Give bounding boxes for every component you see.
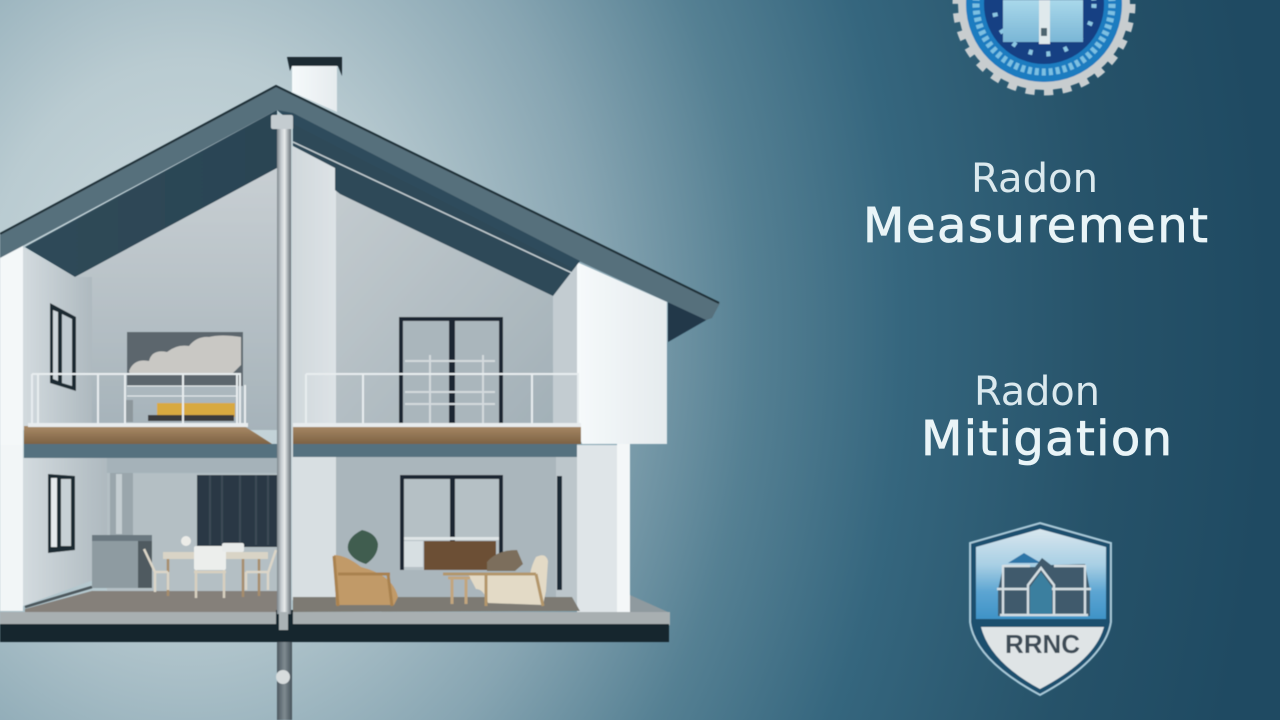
dark curtain [197,475,277,547]
shield house icon [997,553,1091,616]
wall painting [127,332,243,386]
lower right window [400,475,503,570]
sofa and side table [443,550,548,606]
label: Mitigation: Mitigation [921,411,1172,467]
balcony railings [32,374,578,427]
dining set [144,536,276,598]
seal badge [956,0,1132,92]
label: Radon: Radon [974,369,1100,415]
lower left window [48,474,75,553]
chimney [287,57,342,112]
balcony decks [24,423,581,444]
house cross-section [0,57,720,720]
seal serrated edge [956,0,1132,92]
RRNC label: RRNC [1005,629,1080,659]
seal emblem [1003,0,1083,44]
vent and utility cabinet [92,473,152,588]
armchair and plant [334,530,398,606]
upper right window [399,317,503,424]
upper storey walls [0,146,577,600]
label: Radon: Radon [971,156,1098,202]
shield lower panel [981,627,1104,689]
radon vent pipe [271,115,293,720]
heading: radon mitigation [921,369,1172,467]
roof [0,85,720,342]
heading: radon measurement [863,156,1208,254]
foundation slab [0,612,670,642]
seal rings [966,0,1122,82]
RRNC shield badge [970,523,1111,695]
upper balcony furniture [125,400,235,422]
label: Measurement: Measurement [863,198,1208,254]
floors [25,587,668,612]
upper left window [50,303,76,391]
shield outline [970,523,1111,695]
right white wall block [577,262,667,612]
shield sky panel [976,529,1106,619]
lower storey walls [0,444,577,611]
